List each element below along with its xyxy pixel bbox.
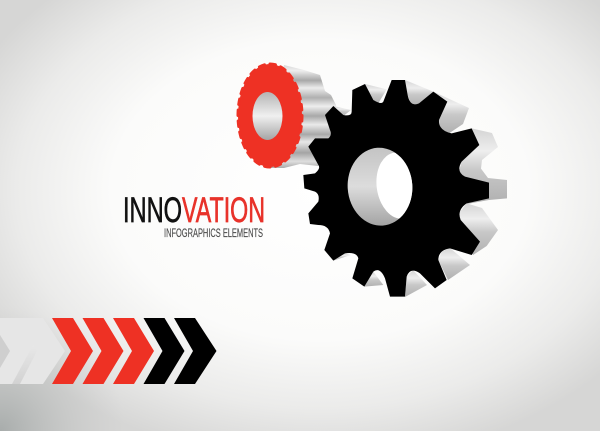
large gear black face: [303, 80, 489, 297]
small red gear: [238, 64, 336, 168]
black chevrons: [144, 318, 216, 384]
large gear side walls: [333, 80, 507, 297]
title: innovation: [123, 191, 265, 230]
title word part: vation: VATION: [182, 191, 265, 230]
large gear hole: [348, 148, 412, 226]
large black gear: [303, 80, 507, 297]
chevron arrows: [0, 318, 216, 384]
subtitle: INFOGRAPHICS ELEMENTS: [164, 226, 263, 240]
small gear red face: [238, 64, 302, 167]
small gear hole: [252, 92, 282, 140]
small gear side wall: [270, 65, 336, 168]
red chevrons: [52, 318, 154, 384]
faded chevrons: [0, 318, 65, 384]
title word part: inno: INNO: [123, 191, 182, 230]
